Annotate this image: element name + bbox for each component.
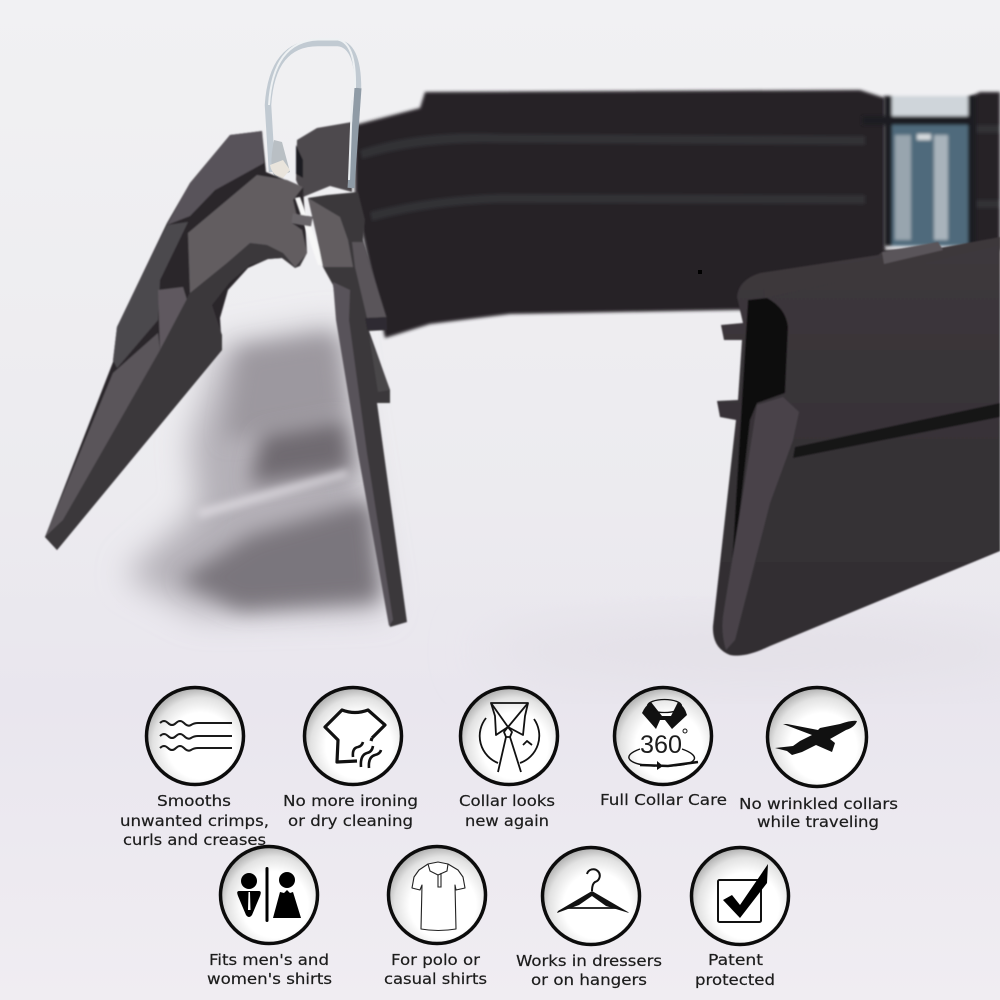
base silhouette [45, 131, 307, 550]
left strip [333, 282, 393, 626]
label: No wrinkled collars [739, 795, 898, 813]
label: Collar looks [459, 792, 555, 810]
label line two: new again [465, 812, 549, 830]
icon: hanger [542, 848, 640, 944]
lower face [45, 293, 190, 537]
feature: dressers or hangers [516, 848, 662, 989]
centre jaw back piece [296, 122, 352, 197]
icon: airplane [768, 688, 866, 786]
feature: men and women [207, 846, 332, 988]
feature: collar looks new [459, 688, 558, 830]
front ridge [722, 397, 799, 650]
label: Smooths [157, 792, 231, 810]
label: Fits men's and [209, 951, 329, 969]
label: Patent [708, 951, 763, 969]
feature: patent [692, 848, 788, 989]
rib [158, 287, 187, 350]
thick edge [45, 243, 307, 550]
label line two: or on hangers [531, 971, 647, 989]
left jaw [45, 131, 307, 550]
label line two: protected [695, 971, 775, 989]
dark slot [793, 403, 1000, 458]
icon: wavy lines [146, 688, 244, 784]
right jaw [713, 237, 1000, 656]
back blade [113, 222, 188, 368]
label line two: casual shirts [384, 970, 487, 988]
feature: polo shirts [384, 846, 487, 988]
feature: full collar care [600, 688, 727, 809]
icon: 360 collar: 360 [640, 731, 682, 759]
cavity [730, 298, 788, 600]
label line two: while traveling [757, 813, 879, 831]
label: No more ironing [283, 792, 418, 810]
shadow under hanger [125, 325, 385, 615]
label: Works in dressers [516, 952, 662, 970]
side blade [352, 242, 386, 318]
icon: man and woman [220, 846, 318, 944]
metal ring [268, 40, 358, 188]
label: Full Collar Care [600, 791, 727, 809]
feature: travel [739, 688, 898, 831]
centre jaw [291, 192, 407, 627]
white wire [295, 197, 325, 265]
icon: polo shirt [388, 846, 486, 944]
silhouette [713, 237, 1000, 656]
dark speck [698, 270, 702, 274]
label line two: or dry cleaning [288, 812, 413, 830]
label: curls and creases [123, 831, 266, 849]
label line two: women's shirts [207, 970, 332, 988]
metal hinge [862, 96, 976, 246]
base silhouette [308, 192, 407, 627]
label: For polo or [391, 951, 481, 969]
front face [308, 198, 353, 267]
icon: collar and tie [460, 688, 558, 784]
tab [882, 242, 943, 264]
top lip [764, 237, 1000, 298]
feature: smooths creases [120, 688, 269, 849]
back panel [167, 131, 264, 225]
upper face [188, 175, 307, 293]
icon: shirt with steam [304, 688, 402, 784]
label [120, 792, 269, 849]
label: unwanted crimps, [120, 812, 269, 830]
back band of hanger [355, 90, 1000, 338]
feature: no ironing [283, 688, 418, 830]
icon: checkbox [692, 848, 788, 944]
